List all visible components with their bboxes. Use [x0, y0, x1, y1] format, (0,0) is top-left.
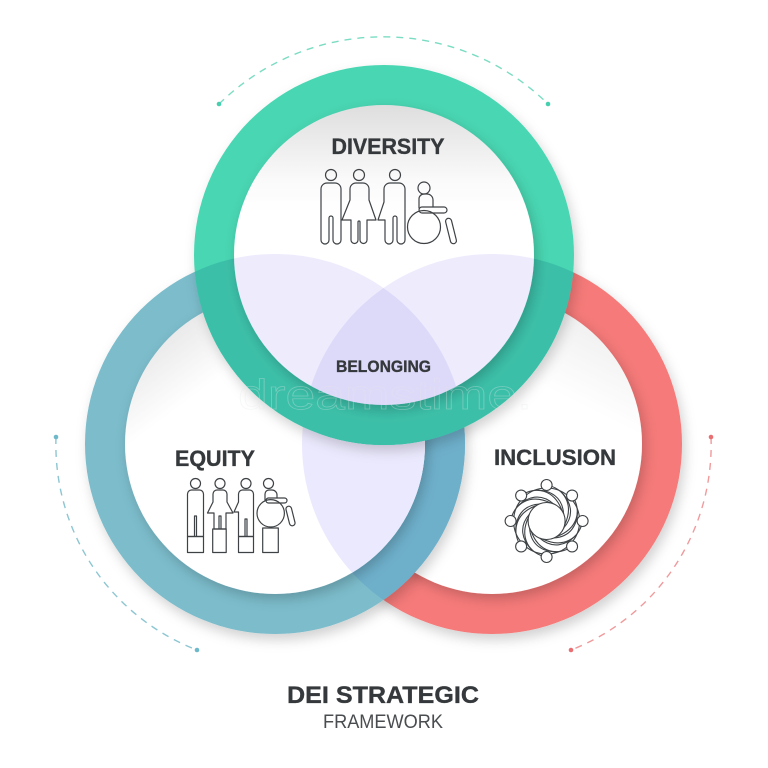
- dashed arc: top: [217, 37, 550, 106]
- diversity ring: [194, 65, 574, 445]
- title line one: DEI STRATEGIC: [287, 682, 479, 709]
- lens: diversity and inclusion overlap: [311, 254, 534, 405]
- belonging label: BELONGING: [336, 358, 431, 376]
- icon: linked circle of people: [502, 476, 591, 566]
- inclusion heading: INCLUSION: [494, 445, 616, 470]
- title line two: FRAMEWORK: [323, 711, 443, 733]
- diversity ring overlap with equity: [194, 258, 460, 445]
- lens: diversity and equity overlap: [234, 254, 456, 405]
- panel: equity: [83, 272, 473, 645]
- dashed arc: right: [569, 435, 713, 652]
- dashed arc: left: [54, 435, 199, 652]
- title: [287, 682, 479, 733]
- panel: diversity: [192, 65, 582, 456]
- icon: people on equalising boxes: [188, 478, 296, 552]
- diversity disc: [234, 105, 534, 405]
- equity heading: EQUITY: [175, 446, 255, 471]
- equity ring overlap with inclusion: [352, 428, 465, 600]
- panel: inclusion: [302, 254, 682, 634]
- inclusion disc: [342, 294, 642, 594]
- watermark: dreamstime.: [238, 371, 532, 418]
- equity ring: [85, 254, 465, 634]
- inclusion ring: [302, 254, 682, 634]
- diversity ring overlap with inclusion: [304, 259, 574, 445]
- equity disc: [125, 294, 425, 594]
- lens: equity and inclusion overlap: [302, 427, 425, 572]
- diversity heading: DIVERSITY: [332, 134, 445, 159]
- icon: diverse people: [321, 170, 457, 244]
